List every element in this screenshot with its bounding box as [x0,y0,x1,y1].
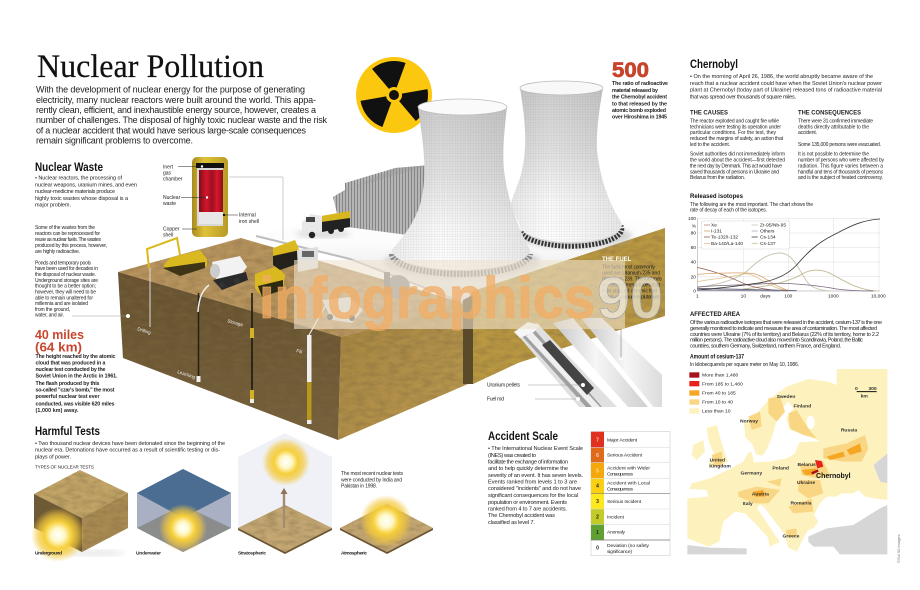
stat: 40 miles: cloud that was produced in a [36,360,106,366]
intro text [36,84,328,146]
table: ines scale [591,432,670,556]
text: harmful tests [35,441,225,460]
well labels: Drilling [137,326,152,335]
land [687,369,887,552]
chart: isotope decay [688,216,886,300]
text: consequences: handful and tens of thousands of persons [798,169,884,175]
scale bar: 0 [855,386,858,392]
text: nuclear waste intro: • Nuclear reactors, the processing of [35,176,122,182]
heading: nuclear waste: Nuclear Waste [35,162,103,174]
text: accident scale: considered "incidents" and do not have [488,486,581,492]
icon: radiation symbol [356,57,432,133]
table: ines scale: Accident with Local [607,480,650,486]
capsule labels: Nuclear [163,195,181,201]
chart: isotope decay: 100 [784,294,793,300]
country labels: Romania [790,500,812,506]
capsule labels: shell [163,232,173,238]
text: waste details: Underground storage sites are [35,278,98,284]
text: causes: Belarus from the radiation. [690,175,745,181]
medium contamination [753,443,862,497]
title: Nuclear Pollution [37,49,264,85]
text: accident scale [488,446,583,526]
text: waste details: water, and air. [35,313,64,319]
test: stratospheric [238,433,332,556]
country labels: Chernobyl [816,473,851,480]
yellow loader [255,266,285,297]
map legend: More than 1,480 [702,372,739,378]
white truck [295,211,351,238]
heading: harmful tests: Harmful Tests [35,426,100,438]
excavator [147,238,207,276]
table: ines scale: Major Accident [607,438,638,444]
illustration: nuclear waste capsule [192,157,228,237]
text: consequences: deaths directly attributable to the [798,124,869,130]
table: ines scale: 1 [596,530,599,536]
text: affected area [690,320,882,349]
scale bar: 300 [868,386,877,392]
low contamination [712,397,868,537]
text: isotopes [690,202,813,214]
gray machine [384,272,410,299]
text: causes: particular conditions. For the test, they [690,130,776,136]
illustration: fuel rods [514,318,662,407]
text: consequences: accident. [798,130,817,136]
chart: isotope decay: Cs-134 [760,235,776,241]
map legend: Less than 10 [702,409,731,415]
chart: isotope decay: days [760,294,771,300]
chart: isotope decay: 40 [691,260,696,266]
capsule labels: waste [163,201,176,207]
country labels: Ukraine [797,480,815,486]
text: nuclear waste intro: highly toxic wastes whose disposal is a [35,196,129,202]
text: harmful tests: • Two thousand nuclear devices have been detonated since the beginning of the [35,441,225,447]
text: causes: Soviet authorities did not immediately inform [690,152,785,158]
text: accident scale: population or environment. Events [488,500,567,506]
heading: amount of cesium: Amount of cesium-137 [690,355,745,361]
text: waste details: Ponds and temporary pools [35,260,92,266]
heading: affected area: AFFECTED AREA [690,311,740,318]
right face second block [465,228,665,384]
text: waste details: thought to be a better option; [35,284,96,290]
leader: waste text to block [72,314,130,318]
country labels: Finland [793,404,811,410]
country labels: Poland [772,466,789,472]
chart: isotope decay: 1 [696,294,699,300]
intro text: number of challenges. The disposal of highly toxic nuclear waste and the risk [36,115,328,125]
table: ines scale: 4 [596,484,599,490]
text: nuclear waste intro [35,176,137,208]
map legend: From 185 to 1,480 [702,381,743,387]
credit: ©Sol 90 Images [896,534,901,563]
text: nuclear waste intro: major problem. [35,202,71,208]
chart: isotope decay: 80 [691,231,696,237]
capsule labels: chamber [163,176,183,182]
table: ines scale: Serious Accident [607,452,643,458]
intro text: of a nuclear accident that would have serious large-scale consequences [36,126,306,136]
country labels: Germany [741,470,762,476]
text: waste details: the disposal of nuclear waste. [35,272,96,278]
chart: isotope decay: Ba-140/La-140 [711,241,743,247]
text: recent tests: were conducted by India and [341,478,402,484]
text: recent tests: Pakistan in 1998. [341,484,377,490]
text: affected area: generally monitored to indicate and measure the area of contamination. The most affected [690,326,877,332]
text: waste details: are highly radioactive. [35,249,80,255]
test: stratospheric: Stratospheric [238,550,266,556]
capsule labels: Internal [239,212,256,218]
intro text: electricity, many nuclear reactors were built around the world. This appa- [36,95,316,105]
text: accident scale: • The International Nuclear Event Scale [488,446,583,452]
intro text: rently clean, efficient, and inexhaustible energy source, however, creates a [36,105,316,115]
text: causes: the world about the accident—first detected [690,158,785,164]
text: the fuel: used are Uranium-235 and [602,270,660,276]
text: waste details: able to remain unaltered for [35,295,93,301]
text: consequences: There were 31 confirmed immediate [798,119,873,125]
country labels: Belarus [798,462,816,468]
stat: 40 miles: conducted, was visible 620 miles [36,402,115,408]
table: ines scale: 7 [596,438,599,444]
well labels: Leaching [177,369,196,380]
table: ines scale: 0 [596,546,599,552]
chart: isotope decay: Zr-95/Nb-95 [760,223,786,229]
text: waste details: from the ground, [35,307,70,313]
chart: isotope decay: Cs-137 [760,241,776,247]
subheading: the causes: THE CAUSES [690,110,728,116]
text: accident scale: The Chernobyl accident was [488,513,555,519]
text: harmful tests: nuclear era. Detonations have occurred as a result of scientific testing or dis- [35,448,220,454]
text: the fuel: Plutonium-239. The fuel rods [602,276,662,282]
stat: 40 miles: 40 miles [35,327,84,342]
text: waste details [35,225,107,319]
text: accident scale: and to help quickly determine the [488,466,568,472]
text: recent tests: The most recent nuclear tests [341,471,404,477]
heading: chernobyl: Chernobyl [690,59,738,71]
text: recent tests [341,471,404,490]
text: isotopes: The following are the most important. The chart shows the [690,202,813,208]
stat: 500: over Hiroshima in 1945 [612,115,667,121]
fuel rod labels [487,382,581,402]
gray land [687,453,887,554]
country labels: Norway [740,418,758,424]
high contamination [815,460,823,468]
text: consequences [798,119,884,181]
leader: capsule to truck [229,177,283,240]
scale bar: km [861,394,868,400]
stat: 40 miles: powerful nuclear test ever [36,394,100,400]
cement mixer [210,256,248,290]
text: consequences: and is the subject of heated controversy. [798,175,883,181]
text: waste details: millennia and are isolated [35,301,88,307]
chart: isotope decay: 20 [691,274,696,280]
capsule labels: Inert [163,164,174,170]
text: accident scale: Events ranked from levels 1 to 3 are [488,480,577,486]
text: waste details: have been used for decades in [35,266,98,272]
label: types of tests: TYPES OF NUCLEAR TESTS [35,465,94,470]
test: underwater [136,469,231,556]
text: consequences: radiation. This figure varies between a [798,163,883,169]
stat: 40 miles [35,327,118,414]
country labels: Kingdom [709,464,731,470]
stat: 40 miles: (1,000 km) away. [36,408,79,414]
well labels [137,318,303,380]
text: affected area: million persons). The radioactive cloud also moved into Scandinavia, Poland, the Baltic [690,338,863,344]
cooling tower back [510,81,632,248]
stat: 40 miles: The height reached by the atomic [36,354,116,360]
country labels: Sweden [777,394,795,400]
table: ines scale: Deviation (no safety [607,543,650,549]
british isles [692,425,728,468]
text: causes [690,119,785,181]
capsule labels: Copper [163,226,180,232]
central block illustration [118,81,667,440]
text: waste details: Some of the wastes from the [35,225,95,231]
table: ines scale: Incident [607,514,625,520]
chart: isotope decay: % [692,223,697,229]
fuel rod labels: Fuel rod [487,396,504,402]
table: ines scale: Anomaly [607,530,626,536]
fuel rod labels: Uranium pellets [487,382,520,388]
text: the fuel: pellets of uranium or plutonium [602,294,660,300]
text: isotopes: rate of decay of each of the isotopes. [690,208,767,214]
capsule labels: iron shell [239,219,259,225]
text: accident scale: classified as level 7. [488,520,535,526]
map legend [689,372,743,415]
country labels: Austria [752,491,769,497]
text: chernobyl: reach that a nuclear accident could have when the Soviet Union's nuclear power [690,81,882,87]
intro text: With the development of nuclear energy for the purpose of generating [36,84,305,94]
text: accident scale: facilitate the exchange of information [488,460,568,466]
text: consequences: It is not possible to determine the [798,152,869,158]
text: the fuel: THE FUEL [602,257,632,263]
text: chernobyl: plant at Chernobyl (today part of Ukraine) released tons of radioactive material [690,88,882,94]
text: harmful tests: plays of power. [35,454,71,460]
dump truck on block [273,240,318,272]
text: consequences: Some 135,000 persons were evacuated. [798,142,881,148]
lakes [807,416,815,429]
chart: isotope decay: 60 [691,245,696,251]
table: ines scale: Accident with Wider [607,466,650,472]
table: ines scale: 6 [596,453,599,459]
chart: isotope decay: I-131 [711,229,722,235]
chart: isotope decay: 1000 [828,294,839,300]
country labels: Russia [841,428,857,434]
test: underground: Underground [35,550,62,556]
map legend: From 10 to 40 [702,400,733,406]
text: the fuel: are sealed metal tubes that [602,282,661,288]
table: ines scale: 2 [596,514,599,520]
table: ines scale: Consequences [607,472,634,478]
map: cesium-137 over europe [687,369,887,554]
text: map subtitle: In kilobecquerels per square meter on May 10, 1986. [690,362,799,368]
very high contamination [811,469,819,474]
text: accident scale: severity of an event. It has seven levels. [488,473,583,479]
subheading: the consequences: THE CONSEQUENCES [798,110,861,116]
text: affected area: Of the various radioactive isotopes that were released in the accident, cesium-137 is the one [690,320,882,326]
stat: 500: material released by [612,88,658,94]
well labels: Fill [296,348,303,355]
table: ines scale: Serious Incident [607,499,642,505]
stat: 500 [612,59,668,121]
scale bar [855,386,877,400]
text: chernobyl: that was spread over thousands of square miles. [690,95,796,101]
stat: 40 miles: nuclear test conducted by the [36,367,106,373]
cooling tower front [384,99,540,278]
test: underground [31,470,128,562]
chart: isotope decay: Others [760,229,775,235]
stat: 40 miles: (64 km) [35,340,82,354]
watermark: infographics [259,266,595,331]
test: atmospheric [340,495,433,556]
text: chernobyl: • On the morning of April 26, 1986, the world abruptly became aware of the [690,74,873,80]
heading: released isotopes: Released isotopes [690,193,743,200]
stat: 40 miles: Soviet Union in the Arctic in 1961. [36,374,118,380]
chart: isotope decay: 0 [693,289,696,295]
building [333,165,430,238]
table: ines scale: 3 [596,499,599,505]
heading: accident scale: Accident Scale [488,431,558,443]
table: ines scale: Consequences [607,486,634,492]
wells [150,268,326,424]
text: accident scale: (INES) was created to [488,453,536,459]
chart: isotope decay: 100 [688,216,696,222]
text: causes: technicians were testing its operation under [690,124,781,130]
text: accident scale: significant consequences for the local [488,493,578,499]
plant pad [256,195,667,303]
text: the fuel: hold stacked ceramic fuel [602,288,657,294]
text: chernobyl [690,74,882,101]
chart: isotope decay: 10,000 [871,294,886,300]
country labels: Italy [743,501,753,507]
stat: 500: The ratio of radioactive [612,81,668,87]
country labels [709,394,857,539]
test: underwater: Underwater [136,550,161,556]
text: causes: led to the accident. [690,142,730,148]
stat: 500: to that released by the [612,101,667,107]
test: atmospheric: Atmospheric [341,550,367,556]
country labels: United [710,458,725,464]
capsule labels [163,164,259,238]
table: ines scale: 5 [596,468,599,474]
text: accident scale: ranked from 4 to 7 are accidents. [488,507,567,513]
stat: 500: the Chernobyl accident [612,95,667,101]
text: waste details: reactors can be reprocessed for [35,231,100,237]
stat: 500: 500 [612,59,649,82]
stat: 40 miles: The flash produced by this [36,381,100,387]
front face [118,272,341,440]
text: causes: reduced the margins of safety, an action that [690,136,784,142]
watermark: 90 [597,266,663,331]
chart: isotope decay: 10 [741,294,746,300]
chart: isotope decay: Te-132/I-132 [711,235,738,241]
text: affected area: countries, southern Germany, Switzerland, northern France, and England. [690,343,841,349]
well labels: Storage [227,318,244,328]
text: causes: the next day by Denmark. This act would have [690,163,782,169]
intro text: remain significant problems to overcome. [36,136,193,146]
right face first block [338,303,468,440]
text: causes: The reactor exploded and caught fire while [690,119,779,125]
country labels: Greece [783,533,800,539]
text: nuclear waste intro: nuclear weapons, uranium mines, and even [35,182,137,188]
text: waste details: reuse as nuclear fuels. The wastes [35,237,102,243]
text: nuclear waste intro: nuclear-medicine materials produce [35,189,115,195]
text: waste details: however, they will need to be [35,289,96,295]
table: ines scale: significance) [607,549,632,555]
text: affected area: countries were Ukraine (7% of its territory) and Belarus (22% of its territory, home to 2.2 [690,332,879,338]
pad edge [256,236,464,303]
text: the fuel: The fuels most commonly [602,264,656,270]
capsule labels: gas [163,170,172,176]
map legend: From 40 to 185 [702,391,736,397]
text: causes: saved thousands of persons in Ukraine and [690,169,779,175]
text: consequences: number of persons who were affected by [798,158,884,164]
second truck [322,297,363,323]
stat: 500: atomic bomb exploded [612,108,666,114]
text: the fuel [602,257,662,300]
stat: 40 miles: so-called "czar's bomb," the most [36,388,115,394]
sand top [118,238,464,337]
text: waste details: produced by this process, however, [35,243,107,249]
chart: isotope decay: Xe [711,223,717,229]
dark corner strip [463,295,473,384]
